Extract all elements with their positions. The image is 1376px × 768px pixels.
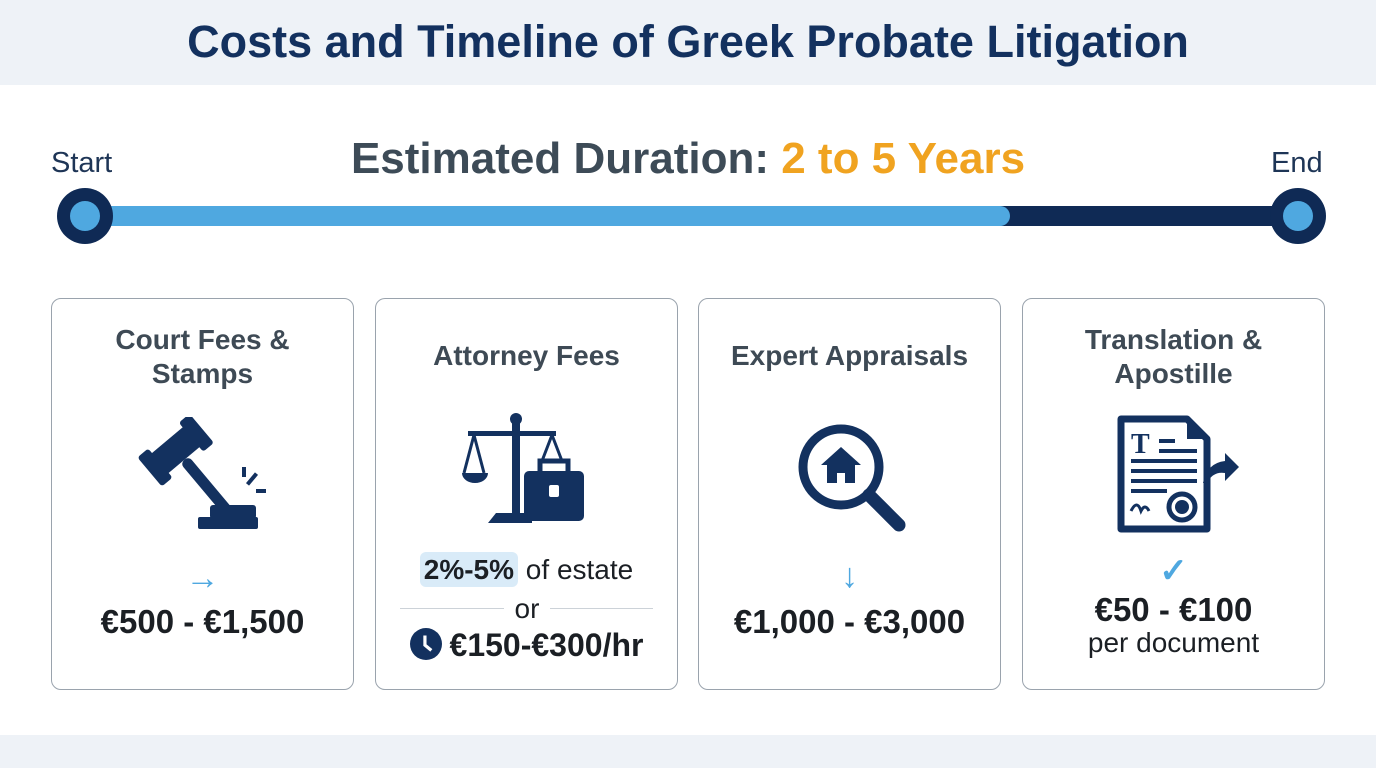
- arrow icon: →: [186, 559, 220, 597]
- value: €500 - €1,500: [101, 603, 304, 640]
- footer band: [0, 735, 1376, 768]
- panel: expert appraisals: [698, 298, 1001, 690]
- heading: Stamps: [152, 358, 253, 389]
- label: start: Start: [51, 147, 112, 179]
- percent text: 2%-5% of estate: [424, 554, 633, 585]
- value: €1,000 - €3,000: [734, 603, 965, 640]
- unit: per document: [1088, 627, 1259, 658]
- arrow icon: ↓: [841, 557, 858, 595]
- heading: [115, 324, 290, 389]
- check icon: ✓: [1159, 552, 1188, 590]
- icon: document: T: [1131, 429, 1150, 460]
- heading: [1085, 324, 1262, 389]
- heading: Translation &: [1085, 324, 1262, 355]
- icon: magnifier house: [798, 424, 906, 532]
- panel: attorney fees: [375, 298, 678, 690]
- timeline bar: [57, 188, 1326, 244]
- panel: translation: [1022, 298, 1325, 690]
- panel: attorney fees: or: [515, 593, 539, 624]
- heading: Court Fees &: [115, 324, 290, 355]
- divider with or: [400, 608, 653, 609]
- hourly rate with clock: €150-€300/hr: [450, 627, 643, 663]
- title: Costs and Timeline of Greek Probate Litigation: [187, 16, 1189, 67]
- label: end: End: [1271, 147, 1323, 179]
- panel: court fees: [51, 298, 354, 690]
- heading: Expert Appraisals: [731, 340, 968, 371]
- icon: gavel: [138, 417, 266, 529]
- value: €50 - €100: [1095, 591, 1252, 628]
- header band: [0, 0, 1376, 85]
- icon: scales and briefcase: [462, 413, 584, 523]
- icon: document: [1118, 416, 1239, 532]
- duration heading: Estimated Duration: 2 to 5 Years: [351, 134, 1025, 183]
- heading: Attorney Fees: [433, 340, 620, 371]
- heading: Apostille: [1114, 358, 1233, 389]
